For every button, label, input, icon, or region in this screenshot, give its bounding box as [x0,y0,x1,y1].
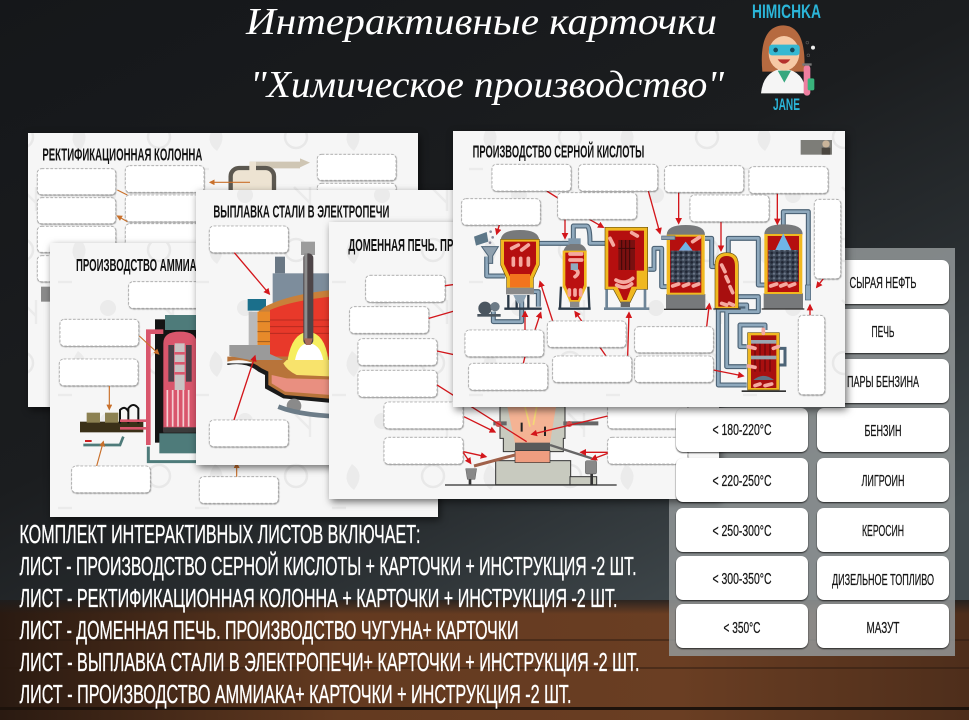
equipment: cyclone [558,238,591,309]
equipment: heat exchanger [742,329,786,392]
cards: right column products: СЫРАЯ НЕФТЬ [850,275,916,292]
cards: left column temperatures: < 250-300°C [712,523,772,540]
text block: kit contents: ЛИСТ - РЕКТИФИКАЦИОННАЯ КОЛОННА + КАРТОЧКИ + ИНСТРУКЦИЯ -2 ШТ. [20,583,618,613]
cards: right column products: БЕНЗИН [864,423,902,440]
equipment: first contact tower [662,225,707,310]
card blanks [59,282,278,503]
equipment: intermediate absorber [713,253,741,310]
equipment: roasting furnace [474,230,542,317]
heading: rectification column: РЕКТИФИКАЦИОННАЯ КОЛОННА [42,145,202,165]
card blanks and arrows [209,226,288,447]
logo: Himichka Jane: HIMICHKA [752,2,821,23]
heading: steel smelting: ВЫПЛАВКА СТАЛИ В ЭЛЕКТРОПЕЧИ [213,202,389,222]
cards: right column products: ЛИГРОИН [862,473,904,490]
heading: ammonia production: ПРОИЗВОДСТВО АММИАКА [76,255,209,275]
equipment: second contact tower [762,224,811,310]
cards: right column products: МАЗУТ [866,620,900,637]
cards: left column temperatures [676,408,808,648]
panel: blast furnace sheet [329,222,719,499]
diagram: column top [210,158,310,198]
icon: scientist girl [761,25,815,96]
cards: left column temperatures: < 350°C [724,620,760,637]
arrows [497,191,823,376]
equipment: waste heat boiler [604,227,649,309]
panel: answer cards background [669,248,955,656]
diagram: electric furnace [227,242,353,417]
cards: right column products: ПЕЧЬ [872,324,894,341]
text block: kit contents: КОМПЛЕКТ ИНТЕРАКТИВНЫХ ЛИСТОВ ВКЛЮЧАЕТ: [20,519,420,549]
logo: Himichka Jane: JANE [773,95,800,114]
logo: Himichka Jane [752,2,821,114]
cards: left column temperatures: < 220-250°C [712,473,772,490]
text block: kit contents [20,519,640,709]
panel: rectification column sheet [28,133,418,407]
card blanks and arrows [350,275,688,464]
cards: right column products [817,260,949,648]
icon: author thumbnail [801,140,832,155]
background: wooden table [0,600,969,720]
card blanks [462,164,841,395]
title: "Химическое производство" [250,64,725,106]
cards: left column temperatures: < 300-350°C [712,571,772,588]
text block: kit contents: ЛИСТ - ПРОИЗВОДСТВО АММИАКА+ КАРТОЧКИ + ИНСТРУКЦИЯ -2 ШТ. [20,679,572,709]
title: Интерактивные карточки [245,1,717,43]
diagram: ammonia reactor [80,315,212,462]
panel: sulfuric acid sheet [453,131,845,407]
text block: kit contents: ЛИСТ - ДОМЕННАЯ ПЕЧЬ. ПРОИЗВОДСТВО ЧУГУНА+ КАРТОЧКИ [20,615,518,645]
diagram: blast furnace [445,407,617,485]
title [245,1,725,106]
cards: right column products: ПАРЫ БЕНЗИНА [847,374,919,391]
card blanks [37,154,396,302]
panel: steel smelting sheet [196,190,586,465]
panel: ammonia production sheet [50,243,438,517]
heading: sulfuric acid: ПРОИЗВОДСТВО СЕРНОЙ КИСЛОТЫ [473,141,644,162]
cards: right column products: КЕРОСИН [862,523,904,540]
pipes [487,212,808,385]
heading: blast furnace: ДОМЕННАЯ ПЕЧЬ. ПРОИЗВОДСТВО ЧУГУНА [348,235,562,255]
cards: left column temperatures: < 180-220°C [712,422,772,439]
